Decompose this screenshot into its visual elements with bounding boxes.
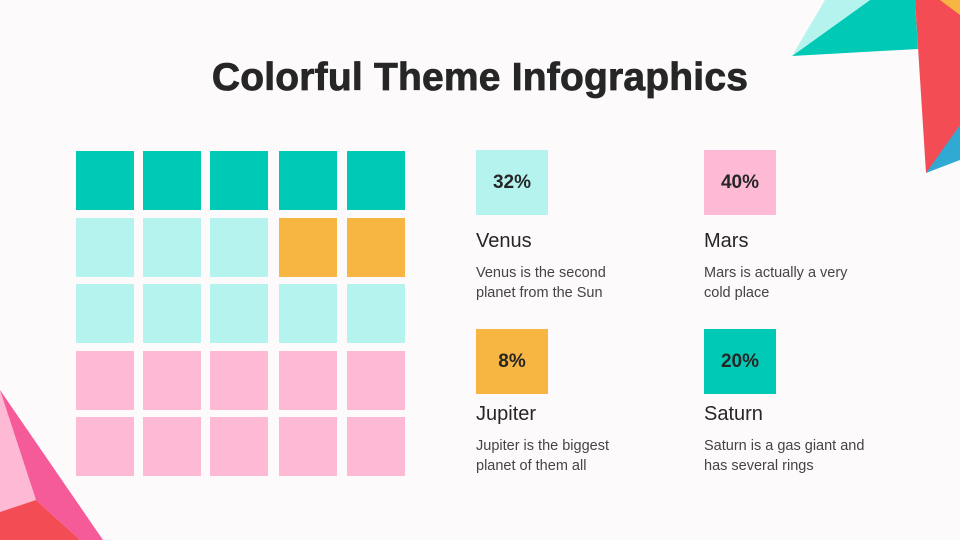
stat: Venus: Venus is the second (476, 265, 606, 281)
stat: Venus (476, 150, 606, 301)
stat: Jupiter: Jupiter (476, 403, 536, 425)
stat: Venus: Venus (476, 230, 532, 252)
stat: Saturn: Saturn (704, 403, 763, 425)
stat: Mars: 40% (721, 172, 759, 192)
stat: Mars (704, 150, 848, 301)
stat: Venus: planet from the Sun (476, 285, 603, 301)
stat: Jupiter (476, 329, 609, 474)
stat: Jupiter: 8% (498, 350, 526, 372)
stat: Mars: Mars is actually a very (704, 265, 847, 281)
stat: Jupiter: Jupiter is the biggest (476, 438, 609, 454)
stat: Saturn: Saturn is a gas giant and (704, 438, 864, 454)
stat: Jupiter: planet of them all (476, 458, 586, 474)
stat: Mars: cold place (704, 285, 769, 301)
grid chart (76, 151, 405, 476)
stat: Saturn (704, 329, 864, 474)
stat: Saturn: 20% (721, 350, 759, 372)
stat: Saturn: has several rings (704, 458, 814, 474)
title: Colorful Theme Infographics (212, 56, 748, 99)
stat: Venus: 32% (493, 172, 531, 192)
stat: Mars: Mars (704, 230, 748, 252)
